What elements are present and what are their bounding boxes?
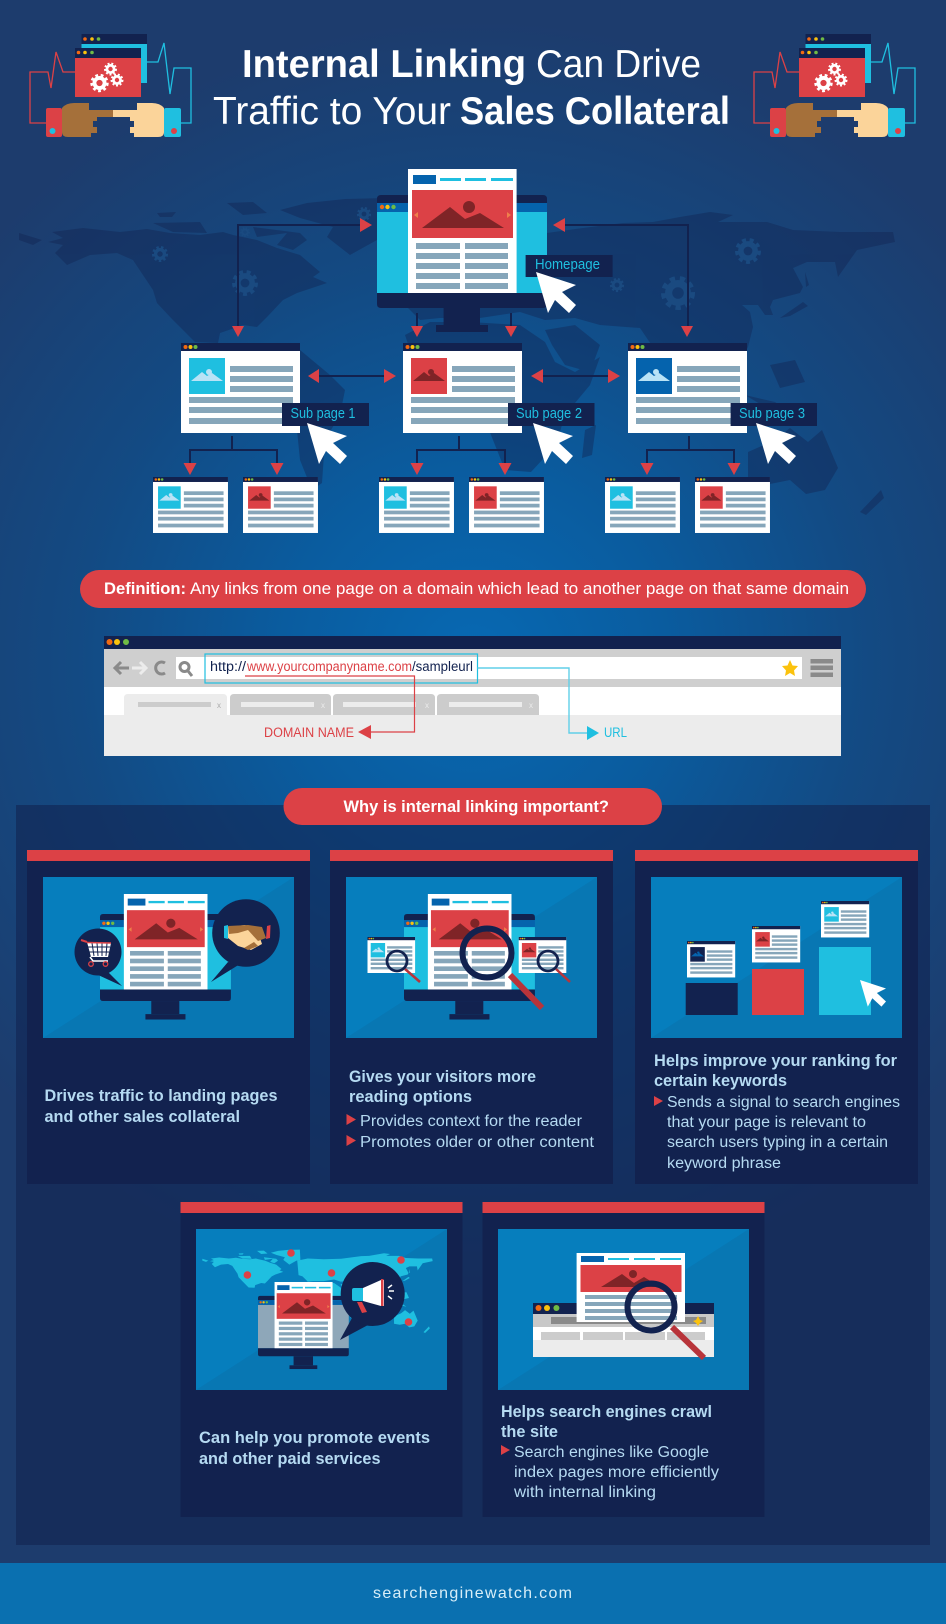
illustration: browser with magnifier [498, 1229, 749, 1390]
icon: megaphone bubble [340, 1262, 405, 1340]
card 5 text: Helps search engines crawl [501, 1403, 712, 1421]
icon: menu [810, 659, 833, 677]
title: Can Drive [536, 43, 701, 86]
card 3 text [654, 1052, 900, 1172]
card 2 text: Gives your visitors more [349, 1068, 536, 1086]
browser URL diagram [104, 636, 841, 756]
homepage monitor [377, 169, 547, 332]
icon: handshake bubble [211, 899, 280, 982]
url box [205, 654, 478, 683]
footer: searchenginewatch.com [373, 1585, 572, 1602]
homepage label [526, 255, 613, 277]
card 3 text: keyword phrase [667, 1155, 781, 1172]
card 4 text: and other paid services [199, 1450, 380, 1468]
card 4 text [199, 1429, 430, 1468]
tabs [124, 694, 539, 715]
icon: star [782, 660, 798, 676]
domain name callout [245, 676, 414, 740]
sub page 1 label [282, 403, 369, 426]
card 3 text: that your page is relevant to [667, 1114, 866, 1131]
card 5 text: the site [501, 1423, 558, 1441]
card 3 text: certain keywords [654, 1072, 787, 1090]
homepage label: Homepage [535, 257, 600, 273]
icon: hands pointing, right [754, 34, 915, 137]
definition pill: Any links from one page on a domain which lead to another page on that same domain [190, 579, 849, 598]
world map background [19, 198, 895, 515]
title: Sales Collateral [460, 90, 730, 133]
card 1 text: and other sales collateral [44, 1108, 240, 1126]
card 5 text [501, 1403, 719, 1501]
domain name callout: DOMAIN NAME [264, 725, 354, 740]
card 2 text: Promotes older or other content [360, 1134, 595, 1151]
site structure diagram [153, 169, 817, 533]
child pages [153, 477, 770, 533]
card 2 text: reading options [349, 1088, 472, 1106]
illustration: world map and megaphone [196, 1229, 447, 1390]
footer [0, 1563, 946, 1624]
icon: hands pointing, left [30, 34, 191, 137]
background gears [153, 208, 759, 307]
title: Internal Linking [242, 43, 526, 86]
card 5 text: Search engines like Google [514, 1444, 709, 1461]
panel: card 5 [482, 1202, 764, 1517]
card 2 text [346, 1068, 595, 1151]
url callout [478, 668, 627, 740]
icon: nav arrows [115, 662, 192, 676]
card 2 text: Provides context for the reader [360, 1113, 582, 1130]
url box: http:// [210, 659, 246, 674]
cursors for sub pages [307, 423, 796, 464]
red arrowheads [184, 218, 740, 475]
card 4 text: Can help you promote events [199, 1429, 430, 1447]
sub page 3 label: Sub page 3 [739, 406, 805, 422]
tabs: x [321, 701, 325, 710]
illustration: monitor with magnifiers [346, 877, 597, 1038]
illustration: ranking bars [651, 877, 902, 1038]
panel: card 4 [180, 1202, 462, 1517]
sub page 1 label: Sub page 1 [290, 406, 356, 422]
sub page 1 window [181, 343, 300, 433]
sub page 3 window [628, 343, 747, 433]
connector lines [190, 225, 734, 463]
url box: /sampleurl [412, 659, 473, 674]
card 3 text: Sends a signal to search engines [667, 1094, 900, 1111]
tabs: x [425, 701, 429, 710]
card 1 text [44, 1087, 278, 1126]
tabs: x [217, 701, 221, 710]
sub page 2 label: Sub page 2 [516, 406, 582, 422]
icon: cursor homepage [536, 272, 576, 313]
definition pill: Definition: [104, 579, 186, 598]
sub page 3 label [731, 403, 817, 426]
url callout: URL [604, 725, 627, 740]
panel: why important [16, 805, 930, 1545]
title [213, 43, 730, 133]
icon: cart bubble [74, 928, 122, 986]
card 1 text: Drives traffic to landing pages [44, 1087, 278, 1105]
heading pill [284, 788, 662, 825]
url box: www.yourcompanyname.com [246, 659, 412, 674]
card 3 text: search users typing in a certain [667, 1134, 888, 1151]
panel: card 1 [27, 850, 310, 1184]
card 5 text: with internal linking [513, 1484, 656, 1501]
definition pill [80, 570, 866, 608]
heading pill: Why is internal linking important? [344, 798, 609, 816]
panel: card 3 [635, 850, 918, 1184]
card 5 text: index pages more efficiently [514, 1464, 719, 1481]
illustration: monitor with cart and handshake [43, 877, 294, 1038]
title: Traffic to Your [213, 90, 451, 133]
sub page 2 label [508, 403, 594, 426]
tabs: x [529, 701, 533, 710]
sub page 2 window [403, 343, 522, 433]
panel: card 2 [330, 850, 613, 1184]
card 3 text: Helps improve your ranking for [654, 1052, 898, 1070]
